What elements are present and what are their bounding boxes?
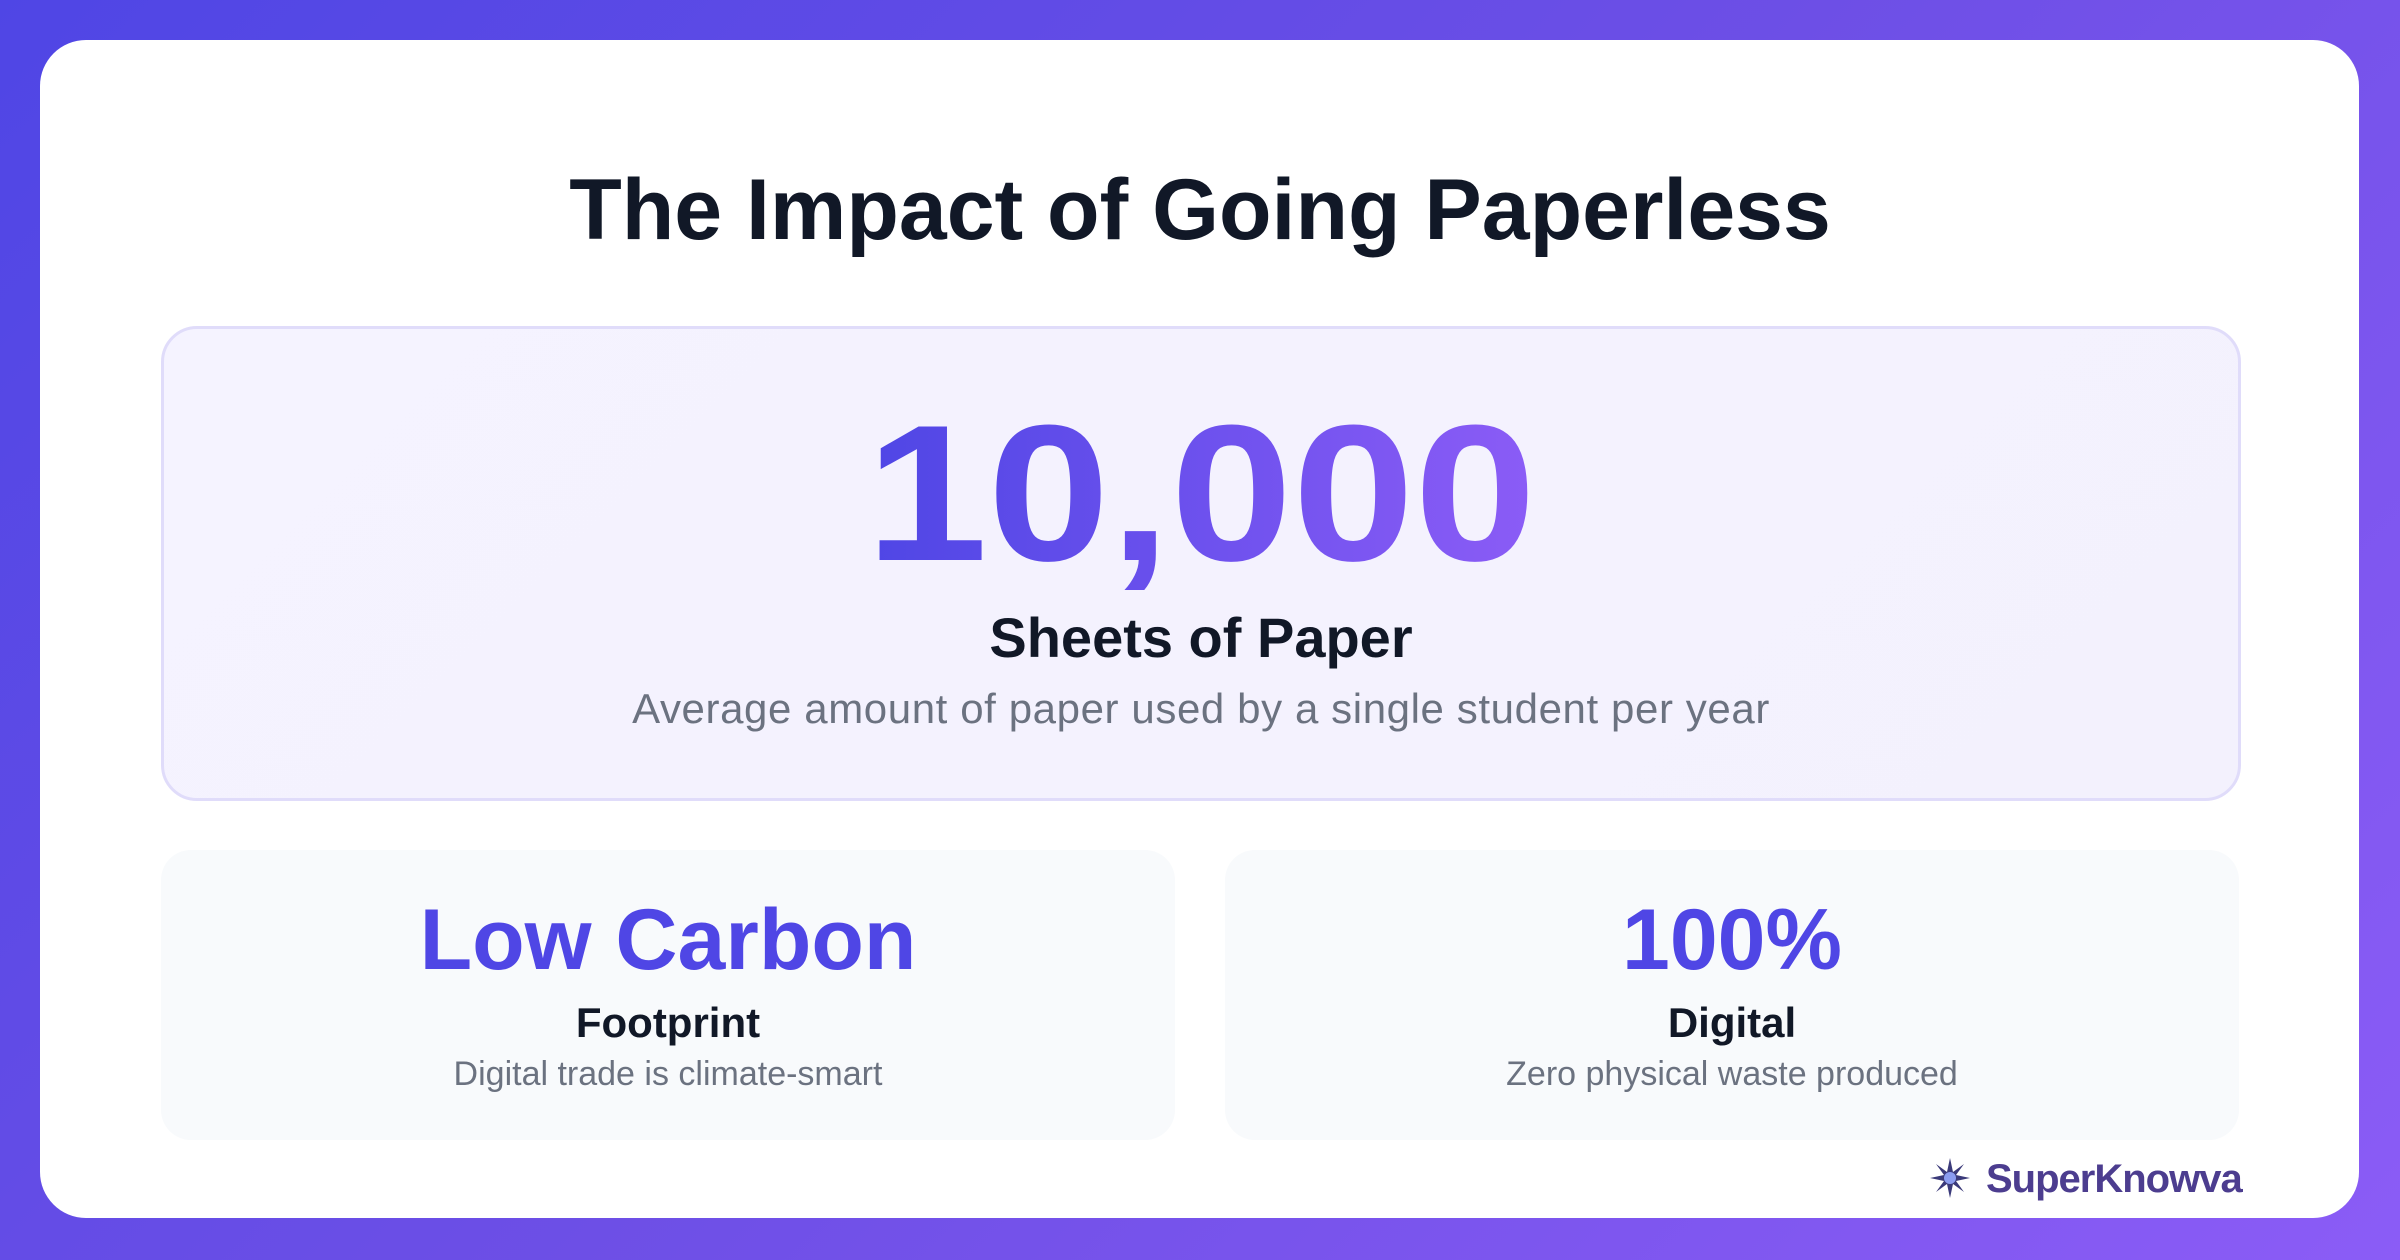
label: digital: Digital bbox=[1668, 999, 1796, 1046]
description: zero waste: Zero physical waste produced bbox=[1506, 1055, 1958, 1093]
logo bbox=[1930, 1157, 2243, 1201]
big number: 10,000 bbox=[866, 385, 1536, 602]
panel: low carbon bbox=[161, 850, 1175, 1140]
hero description: Average amount of paper used by a single student per year bbox=[632, 685, 1770, 732]
logo text: SuperKnowva bbox=[1986, 1157, 2242, 1201]
heading: low carbon: Low Carbon bbox=[420, 892, 916, 988]
description: climate-smart: Digital trade is climate-smart bbox=[454, 1055, 882, 1093]
heading: 100%: 100% bbox=[1622, 892, 1842, 988]
hero label: Sheets of Paper bbox=[989, 606, 1413, 669]
icon: logo star bbox=[1930, 1158, 1970, 1198]
label: footprint: Footprint bbox=[576, 999, 760, 1046]
title: The Impact of Going Paperless bbox=[569, 162, 1831, 258]
panel: digital bbox=[1225, 850, 2239, 1140]
panel: hero stat bbox=[161, 326, 2241, 801]
